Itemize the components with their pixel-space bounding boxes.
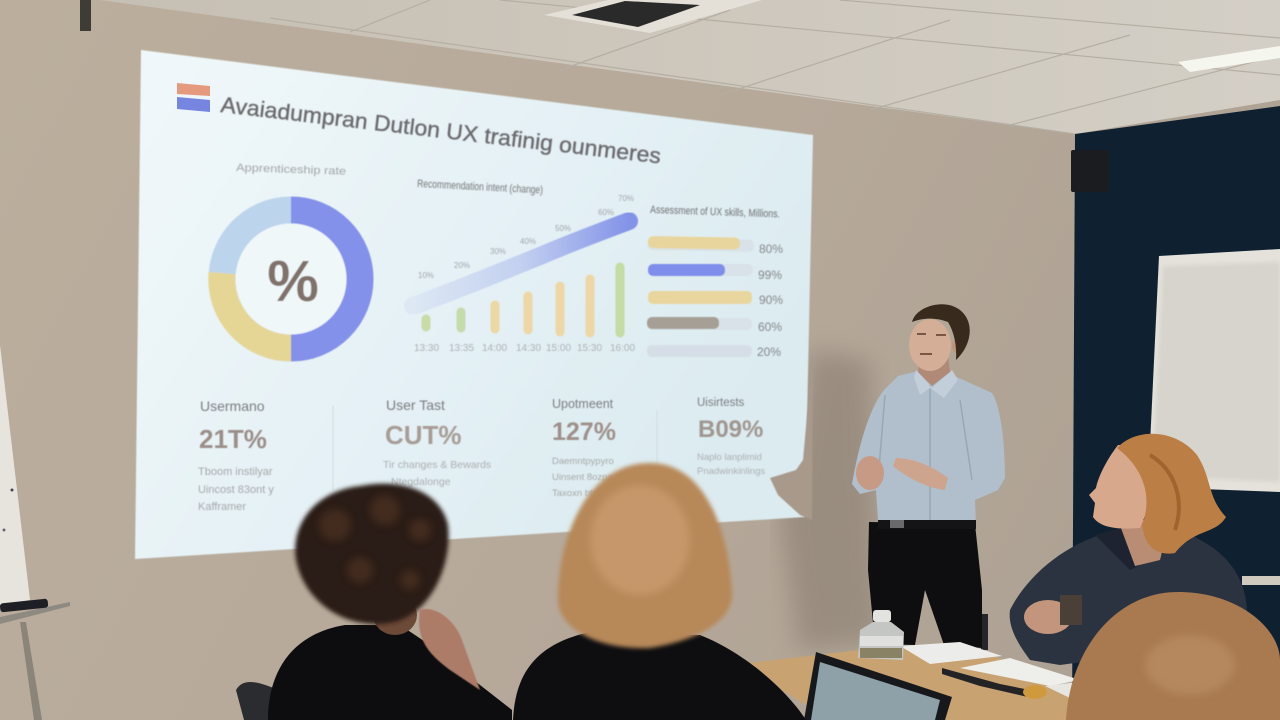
horizontal bar values: 99%: [758, 268, 782, 282]
hair: [295, 484, 449, 624]
donut chart: [222, 210, 360, 348]
trend labels: 60%: [598, 208, 614, 217]
slide title: Avaiadumpran Dutlon UX trafinig ounmeres: [219, 92, 662, 169]
trend labels: 10%: [418, 271, 434, 280]
hand at cheek: [419, 609, 480, 690]
stat: user test: Ntegdalonge: [391, 476, 451, 488]
chair back: [236, 682, 325, 720]
stat: upgrade: Uinsent 8ozpa: [552, 472, 613, 483]
trend labels: 30%: [490, 247, 506, 256]
hands: [856, 456, 884, 490]
audience member: blurred foreground head: [1066, 592, 1280, 720]
stat: user test: CUT%: [385, 420, 462, 450]
speaker: [1071, 150, 1109, 192]
projection screen: [135, 50, 813, 559]
presenter shadow edge on slide: [770, 350, 813, 520]
bar axis labels: 13:30: [414, 343, 439, 354]
stat: users: B09%: [698, 416, 763, 443]
hand holding device: [1024, 600, 1072, 634]
stat: user metric 1: Kafframer: [198, 501, 246, 513]
left flipchart: [0, 345, 30, 605]
hair curls: [319, 495, 431, 590]
table: [740, 642, 1075, 720]
stat: upgrade: Daemntpypyro: [552, 456, 614, 467]
trend swoosh: [413, 221, 629, 306]
vertical bars: [426, 267, 620, 333]
bar axis labels: 14:00: [482, 343, 507, 354]
ceiling vent: [544, 0, 762, 33]
body: [268, 625, 512, 720]
flipchart tray and pens: [0, 599, 70, 720]
stat: user metric 1: Tboom instilyar: [198, 466, 273, 478]
stat: user metric 1: [198, 398, 274, 513]
stat: upgrade: Taxoxn btpt: [552, 488, 601, 499]
body: [513, 632, 806, 720]
trend labels: 70%: [618, 194, 634, 203]
bar axis labels: 15:00: [546, 343, 571, 354]
neck: [373, 595, 417, 635]
donut heading: Apprenticeship rate: [236, 162, 346, 178]
trend labels: 50%: [555, 224, 571, 233]
audience member: dark curly hair: [236, 484, 512, 720]
belt: [878, 520, 976, 529]
ceiling light: [1178, 46, 1280, 72]
bar axis labels: 13:35: [449, 343, 474, 354]
collar: [914, 370, 958, 398]
presenter: [852, 304, 1005, 650]
stat: upgrade: Upotmeent: [552, 397, 614, 411]
face: [909, 319, 951, 371]
chair behind presenter: [981, 614, 988, 650]
hair: [1117, 434, 1226, 554]
seated woman with auburn hair: [1010, 434, 1247, 665]
hair: [558, 463, 732, 648]
bar axis labels: 14:30: [516, 343, 541, 354]
wall mount: [80, 0, 91, 31]
bar axis labels: 15:30: [577, 343, 602, 354]
trend labels: [418, 194, 634, 280]
whiteboard ledge: [1242, 576, 1280, 585]
slide logo: [177, 83, 210, 112]
horizontal bar values: 60%: [758, 320, 782, 334]
stat dividers: [333, 405, 657, 490]
stat: user test: User Tast: [386, 397, 445, 413]
eyes and mouth: [917, 334, 946, 354]
laptop: [804, 652, 952, 720]
stat: upgrade: [552, 397, 616, 499]
horizontal bar values: 90%: [759, 293, 783, 307]
dark navy wall: [1072, 106, 1280, 720]
water bottle: [858, 610, 904, 660]
horizontal bar values: 80%: [759, 242, 783, 256]
neck: [1118, 520, 1170, 566]
horizontal bars: [647, 236, 754, 357]
stat: user metric 1: Uincost 83ont y: [198, 484, 274, 496]
trend labels: 40%: [520, 237, 536, 246]
trend labels: 20%: [454, 261, 470, 270]
bar chart heading: Recommendation intent (change): [417, 178, 543, 197]
stat: users: Naplo lanplimid: [697, 452, 762, 463]
whiteboard: [1148, 249, 1280, 492]
stat: user test: Tir changes & Bewards: [383, 459, 491, 471]
hair: [912, 304, 970, 360]
neck: [918, 356, 950, 386]
stat: upgrade: 127%: [552, 418, 616, 446]
stat: users: Pnadwinkinlings: [697, 466, 765, 477]
stat: users: Uisirtests: [697, 397, 745, 409]
shirt: [852, 368, 1005, 526]
face: [1089, 445, 1160, 529]
sweater: [1010, 532, 1247, 665]
bar axis labels: 16:00: [610, 343, 635, 354]
stat: user test: [383, 397, 491, 488]
stat: users: [697, 397, 765, 477]
ceiling: [100, 0, 1280, 134]
horizontal bar values: 20%: [757, 345, 781, 359]
horizontal bar heading: Assessment of UX skills, Millions.: [650, 204, 780, 221]
audience member: blonde hair: [513, 463, 806, 720]
stat: user metric 1: 21T%: [199, 424, 267, 454]
trousers: [868, 522, 982, 648]
bar axis labels: [414, 343, 635, 354]
presenter shadow on wall: [780, 350, 880, 650]
donut chart: %: [267, 249, 319, 314]
table papers: [900, 642, 1080, 699]
horizontal bar values: [757, 242, 783, 359]
stat: user metric 1: Usermano: [200, 398, 265, 414]
